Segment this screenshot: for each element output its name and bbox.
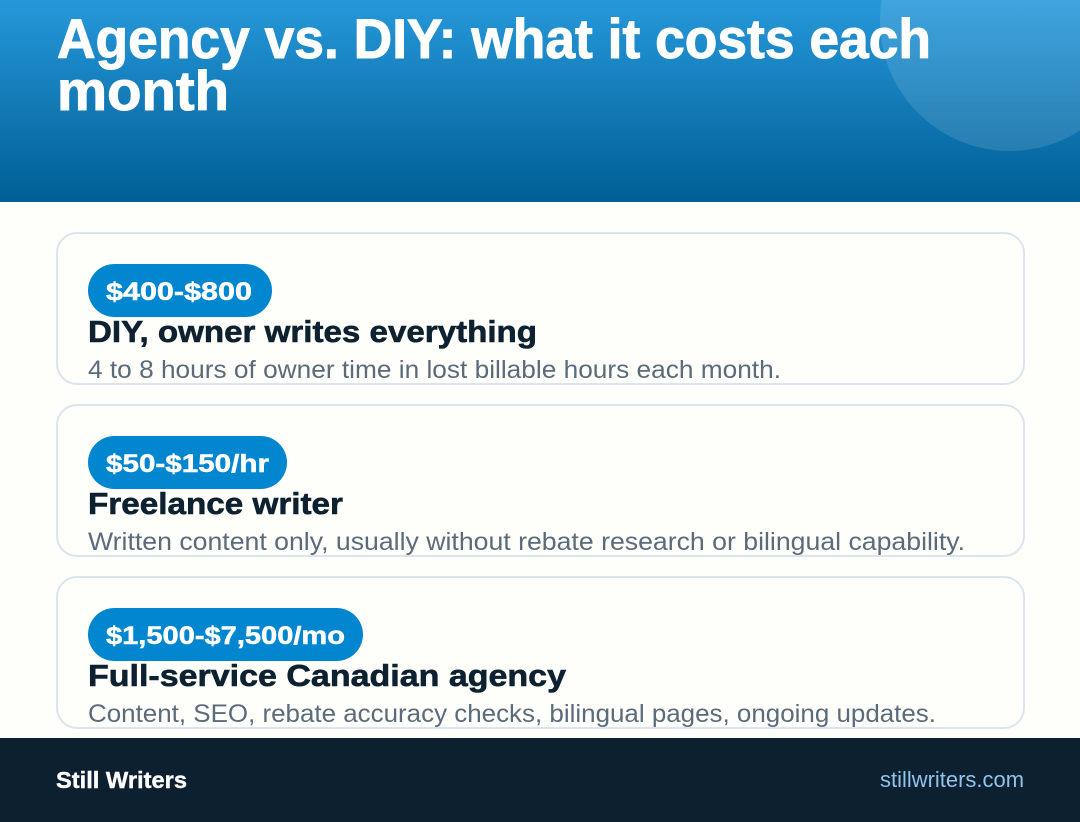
title: Agency vs. DIY: what it costs each bbox=[57, 7, 931, 70]
heading: Agency: Full-service Canadian agency bbox=[88, 658, 567, 693]
heading: Freelance: Freelance writer bbox=[88, 486, 343, 521]
title bbox=[57, 7, 931, 122]
description: Freelance: Written content only, usually without rebate research or bilingual capability. bbox=[88, 528, 965, 556]
panel: Agency bbox=[57, 577, 1024, 728]
decorative circle bbox=[880, 0, 1080, 151]
price pill: Agency bbox=[88, 608, 363, 661]
panel: Freelance bbox=[57, 405, 1024, 556]
price pill: DIY: $400-$800 bbox=[106, 278, 252, 306]
description: DIY: 4 to 8 hours of owner time in lost billable hours each month. bbox=[88, 356, 781, 384]
price pill: Freelance bbox=[88, 436, 287, 489]
description: Agency: Content, SEO, rebate accuracy checks, bilingual pages, ongoing updates. bbox=[88, 700, 936, 728]
panel: DIY bbox=[57, 233, 1024, 384]
brand name: Still Writers bbox=[56, 767, 187, 793]
price pill: Agency: $1,500-$7,500/mo bbox=[106, 622, 345, 650]
website: stillwriters.com bbox=[880, 767, 1024, 792]
heading: DIY: DIY, owner writes everything bbox=[88, 314, 537, 349]
title: month bbox=[57, 59, 229, 122]
price pill: Freelance: $50-$150/hr bbox=[106, 450, 269, 478]
footer bbox=[0, 738, 1080, 822]
header banner bbox=[0, 0, 1080, 202]
price pill: DIY bbox=[88, 264, 272, 317]
